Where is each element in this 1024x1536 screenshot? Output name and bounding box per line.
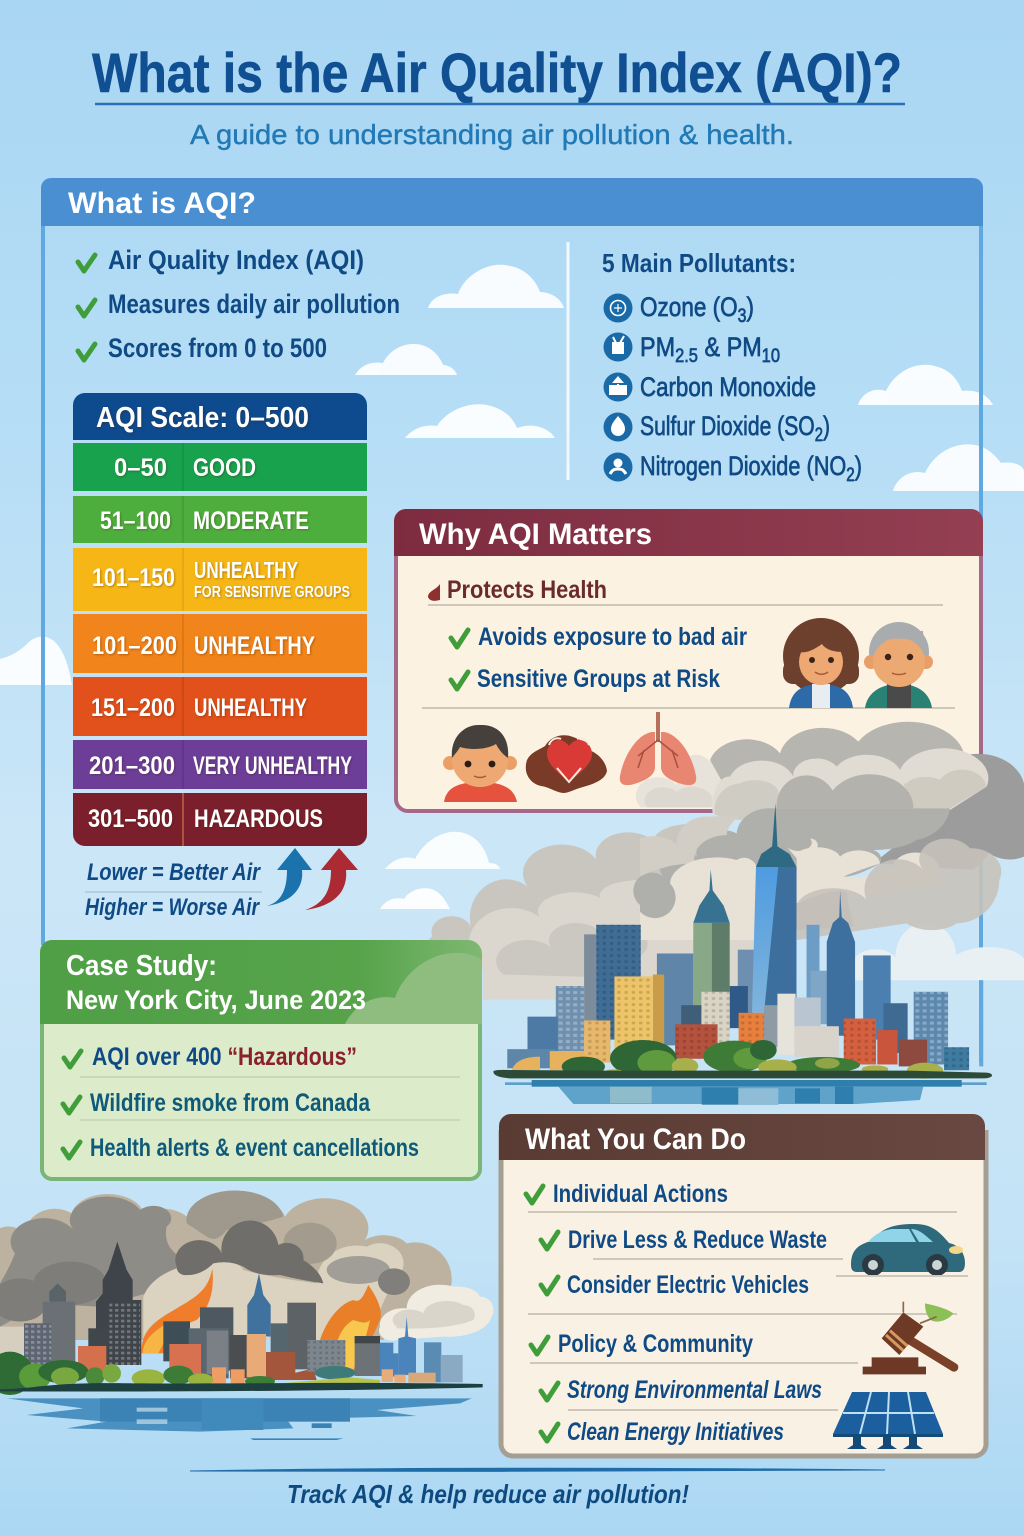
panel body xyxy=(501,1130,986,1456)
pollutant: nitrogen dioxide: ) xyxy=(855,451,862,481)
facts list xyxy=(78,245,400,363)
icon: gavel xyxy=(863,1302,954,1374)
pollutant: sulfur dioxide xyxy=(604,411,830,446)
checklist: Health alerts & event cancellations xyxy=(90,1134,419,1162)
panel header xyxy=(40,940,482,1024)
icon: woman xyxy=(783,618,859,708)
policy and community: Policy & Community xyxy=(558,1330,753,1358)
scale row: good: 0–50 xyxy=(114,454,167,482)
panel header xyxy=(499,1114,985,1160)
scale row: unhealthy for sensitive groups: 101–150 xyxy=(92,564,175,592)
subheading: Protects Health xyxy=(447,576,607,604)
scale row: unhealthy for sensitive groups: UNHEALTHY xyxy=(194,557,298,583)
panel heading: What is AQI? xyxy=(68,187,256,220)
island shore xyxy=(493,1070,992,1078)
scale header xyxy=(73,393,367,440)
water reflection xyxy=(505,1080,987,1105)
scale row: unhealthy orange: UNHEALTHY xyxy=(194,632,315,660)
skyline: right tower xyxy=(827,890,855,1036)
policy and community xyxy=(530,1330,858,1446)
panel: case study xyxy=(40,940,482,1179)
smoke: upper billows xyxy=(633,722,1024,940)
smoke plume and NYC skyline xyxy=(427,712,1024,1105)
pollutant: carbon monoxide: Carbon Monoxide xyxy=(640,372,816,402)
scale row: very unhealthy: VERY UNHEALTHY xyxy=(193,752,352,780)
icon: blue arrow xyxy=(267,848,312,906)
pollutant: particulate matter: PM xyxy=(640,332,680,362)
facts list: Air Quality Index (AQI) xyxy=(108,245,364,275)
panel header xyxy=(41,178,983,226)
pollutant: sulfur dioxide: Sulfur Dioxide (SO xyxy=(640,411,864,441)
skyline: green tower xyxy=(693,869,730,1011)
scale row: hazardous: 301–500 xyxy=(88,805,173,833)
pollutant: ozone: ) xyxy=(746,292,754,322)
scale row: moderate xyxy=(73,496,367,543)
checklist: AQI over 400 “Hazardous” xyxy=(92,1043,357,1071)
icon: lungs xyxy=(620,712,696,785)
smoke: lower left lobes xyxy=(427,824,1024,1066)
footer line xyxy=(190,1468,885,1471)
AQI scale table: AQI Scale: 0–500 xyxy=(96,402,309,434)
scale row: good xyxy=(73,443,367,491)
scale row: unhealthy orange xyxy=(73,614,367,673)
title: What is the Air Quality Index (AQI)? xyxy=(92,41,902,104)
scale row: hazardous xyxy=(73,793,367,846)
panel body xyxy=(396,511,981,811)
panel heading: Case Study: xyxy=(66,950,217,982)
panel heading: What You Can Do xyxy=(525,1123,746,1156)
health checklist: Avoids exposure to bad air xyxy=(478,623,747,651)
pollutant: particulate matter: 2.5 xyxy=(675,346,698,367)
facts list: Scores from 0 to 500 xyxy=(108,333,327,363)
icon: boy xyxy=(443,725,517,802)
scale row: unhealthy for sensitive groups: FOR SENSITIVE GROUPS xyxy=(194,584,350,601)
scale legend: Higher = Worse Air xyxy=(85,894,260,921)
pollutant: nitrogen dioxide: Nitrogen Dioxide (NO xyxy=(640,451,897,481)
icon: small heart xyxy=(428,584,440,601)
pollutant: ozone xyxy=(604,292,754,327)
panel: what you can do xyxy=(499,1114,986,1456)
scale row: moderate: 51–100 xyxy=(100,507,171,535)
scale legend xyxy=(85,859,262,921)
icon: solar panel xyxy=(833,1392,943,1449)
pollutants list xyxy=(602,248,862,486)
pale cloud right xyxy=(850,923,1024,980)
icon: heart xyxy=(526,735,607,793)
scale row: very unhealthy: 201–300 xyxy=(89,752,175,780)
shore, trees and water xyxy=(493,1040,992,1105)
scale row: unhealthy orange: 101–200 xyxy=(92,632,177,660)
skyline: central tower xyxy=(752,803,796,1013)
panel subheading: New York City, June 2023 xyxy=(66,985,366,1015)
AQI scale table xyxy=(73,393,367,846)
scale row: unhealthy red: UNHEALTHY xyxy=(194,694,307,722)
panel header xyxy=(394,509,983,556)
individual actions: Consider Electric Vehicles xyxy=(567,1271,809,1299)
individual actions: Drive Less & Reduce Waste xyxy=(568,1226,827,1254)
divider xyxy=(566,242,570,480)
pollutant: particulate matter: & PM xyxy=(698,332,762,362)
checklist xyxy=(63,1043,460,1162)
scale row: good: GOOD xyxy=(193,454,256,482)
health checklist xyxy=(451,623,747,693)
panel heading: Why AQI Matters xyxy=(419,518,652,551)
policy and community: Strong Environmental Laws xyxy=(567,1376,822,1404)
shore xyxy=(0,1383,483,1392)
wildfire city illustration xyxy=(0,1190,493,1440)
panel frame xyxy=(43,226,981,1062)
pollutant: nitrogen dioxide: 2 xyxy=(846,465,855,486)
buildings xyxy=(24,1242,463,1384)
panel: why AQI matters xyxy=(394,509,983,811)
smoke: white cloud right xyxy=(379,1285,493,1341)
scale legend: Lower = Better Air xyxy=(87,859,261,886)
panel: what is AQI xyxy=(41,178,983,1062)
footer text: Track AQI & help reduce air pollution! xyxy=(287,1479,689,1509)
smoke xyxy=(0,1190,493,1353)
pollutant: nitrogen dioxide xyxy=(604,451,862,486)
skyline: back towers xyxy=(507,925,948,1068)
trees xyxy=(0,1352,380,1395)
pollutant: particulate matter: 10 xyxy=(762,346,780,367)
icon: red arrow xyxy=(305,848,358,910)
pollutant: particulate matter xyxy=(604,332,780,367)
scale row: unhealthy for sensitive groups xyxy=(73,548,367,611)
icon: elderly man xyxy=(864,622,933,708)
pollutant: ozone: 3 xyxy=(738,306,746,327)
icon: car xyxy=(836,1224,968,1276)
facts list: Measures daily air pollution xyxy=(108,289,400,319)
checklist: Wildfire smoke from Canada xyxy=(90,1089,371,1117)
water reflection xyxy=(7,1398,472,1440)
health checklist: Sensitive Groups at Risk xyxy=(477,665,720,693)
skyline: front buildings xyxy=(550,975,969,1070)
subtitle: A guide to understanding air pollution & health. xyxy=(190,119,794,150)
pollutants list: 5 Main Pollutants: xyxy=(602,248,796,278)
skyline xyxy=(507,803,969,1070)
policy and community: Clean Energy Initiatives xyxy=(567,1418,784,1446)
small shore buildings xyxy=(512,1053,585,1070)
scale row: very unhealthy xyxy=(73,740,367,789)
decorative smoke on header xyxy=(345,953,482,1024)
trees xyxy=(562,1040,943,1079)
fire left xyxy=(142,1268,213,1353)
scale row: unhealthy red: 151–200 xyxy=(91,694,175,722)
background clouds xyxy=(0,265,1024,909)
scale row: unhealthy red xyxy=(73,677,367,736)
fire right xyxy=(320,1285,381,1370)
pollutant: sulfur dioxide: ) xyxy=(823,411,830,441)
individual actions xyxy=(526,1180,957,1299)
individual actions: Individual Actions xyxy=(553,1180,728,1208)
title underline xyxy=(95,103,905,105)
panel body xyxy=(42,1010,480,1179)
scale row: hazardous: HAZARDOUS xyxy=(194,805,323,833)
pollutant: ozone: Ozone (O xyxy=(640,292,757,322)
scale row: moderate: MODERATE xyxy=(193,507,309,535)
pollutant: sulfur dioxide: 2 xyxy=(815,425,823,446)
